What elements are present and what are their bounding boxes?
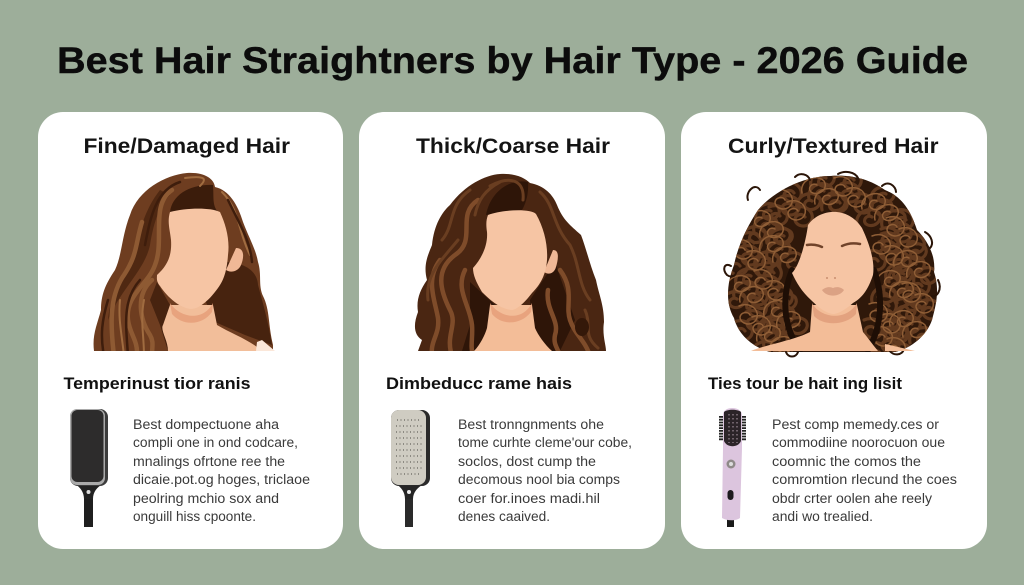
text block: onguill hiss cpoonte. (133, 509, 256, 524)
subheading: Dimbeducc rame hais (386, 374, 572, 393)
illustration: woman with curly hair (720, 170, 945, 363)
illustration: woman with wavy fine hair (94, 173, 275, 356)
text block: mnalings ofrtone ree the (133, 454, 285, 469)
nose (826, 277, 836, 279)
title: Best Hair Straightners by Hair Type - 2026 Guide (57, 40, 968, 81)
text block: Pest comp memedy.ces or (772, 417, 940, 432)
icon: silver brush straightener (391, 410, 430, 527)
icon: lilac hot brush (721, 408, 744, 527)
text block: peolring mchio sox and (133, 491, 279, 506)
text block: compli one in ond codcare, (133, 435, 298, 450)
eyebrows (807, 243, 860, 247)
heading: curly/textured hair: Curly/Textured Hair (728, 134, 939, 158)
panel: fine/damaged hair (38, 112, 343, 549)
text block (133, 417, 310, 524)
illustration: woman with thick wavy hair (415, 174, 606, 356)
text block: commodiine noorocuon oue (772, 435, 945, 450)
panel: curly/textured hair (681, 112, 987, 549)
text block (772, 417, 957, 524)
text block: dicaie.pot.og hoges, triclaoe (133, 472, 310, 487)
panel: thick/coarse hair (359, 112, 665, 549)
heading: thick/coarse hair: Thick/Coarse Hair (416, 134, 611, 158)
text block: denes caaived. (458, 509, 550, 524)
text block: Best tronngnments ohe (458, 417, 604, 432)
text block: tome curhte cleme'our cobe, (458, 435, 632, 450)
subheading: Temperinust tior ranis (64, 374, 250, 393)
heading: fine/damaged hair: Fine/Damaged Hair (84, 134, 291, 158)
text block (458, 417, 632, 524)
lips (822, 287, 844, 296)
icon: black straightener (70, 409, 108, 527)
text block: decomous nool bia comps (458, 472, 620, 487)
text block: coer for.inoes madi.hil (458, 491, 600, 506)
text block: andi wo trealied. (772, 509, 873, 524)
text block: soclos, dost cump the (458, 454, 596, 469)
text block: coomnic the comos the (772, 454, 921, 469)
text block: Best dompectuone aha (133, 417, 280, 432)
subheading: Ties tour be hait ing lisit (708, 374, 902, 393)
text block: obdr crter oolen ahe reely (772, 491, 932, 506)
text block: comromtion rlecund the coes (772, 472, 957, 487)
